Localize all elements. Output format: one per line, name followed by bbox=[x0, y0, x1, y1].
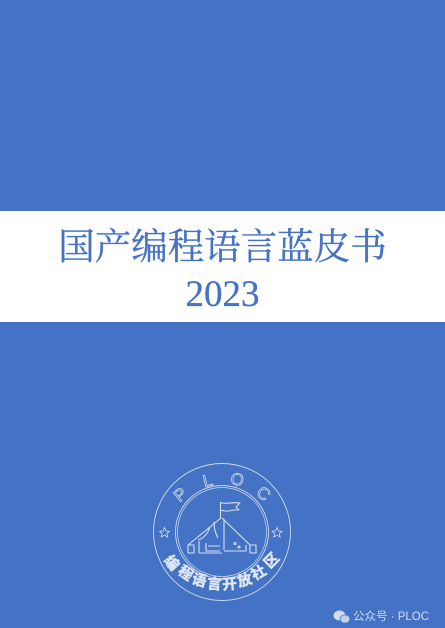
logo top letters PLOC: L bbox=[201, 470, 215, 491]
title: 国产编程语言蓝皮书 bbox=[58, 226, 387, 267]
logo bottom community name: 程 bbox=[175, 562, 197, 585]
logo bottom community name: 语 bbox=[190, 571, 209, 591]
logo bottom community name: 放 bbox=[235, 569, 255, 591]
logo top letters PLOC: C bbox=[253, 483, 274, 505]
year: 2023 bbox=[186, 274, 260, 315]
logo bottom community name: 开 bbox=[222, 576, 238, 594]
logo bottom community name: 编 bbox=[160, 551, 183, 574]
logo bottom community name bbox=[160, 550, 283, 594]
logo top letters PLOC bbox=[170, 469, 274, 506]
watermark text: 公众号 · PLOC bbox=[353, 611, 429, 623]
logo tent and flag bbox=[188, 502, 256, 553]
logo top letters PLOC: O bbox=[229, 469, 246, 490]
watermark: WeChat icon bbox=[334, 610, 350, 623]
logo bottom community name: 言 bbox=[206, 574, 222, 594]
white title band bbox=[0, 211, 445, 322]
logo bottom community name: 区 bbox=[261, 550, 283, 572]
logo top letters PLOC: P bbox=[170, 484, 191, 506]
logo bottom community name: 社 bbox=[248, 561, 270, 584]
logo stars bbox=[160, 528, 282, 537]
